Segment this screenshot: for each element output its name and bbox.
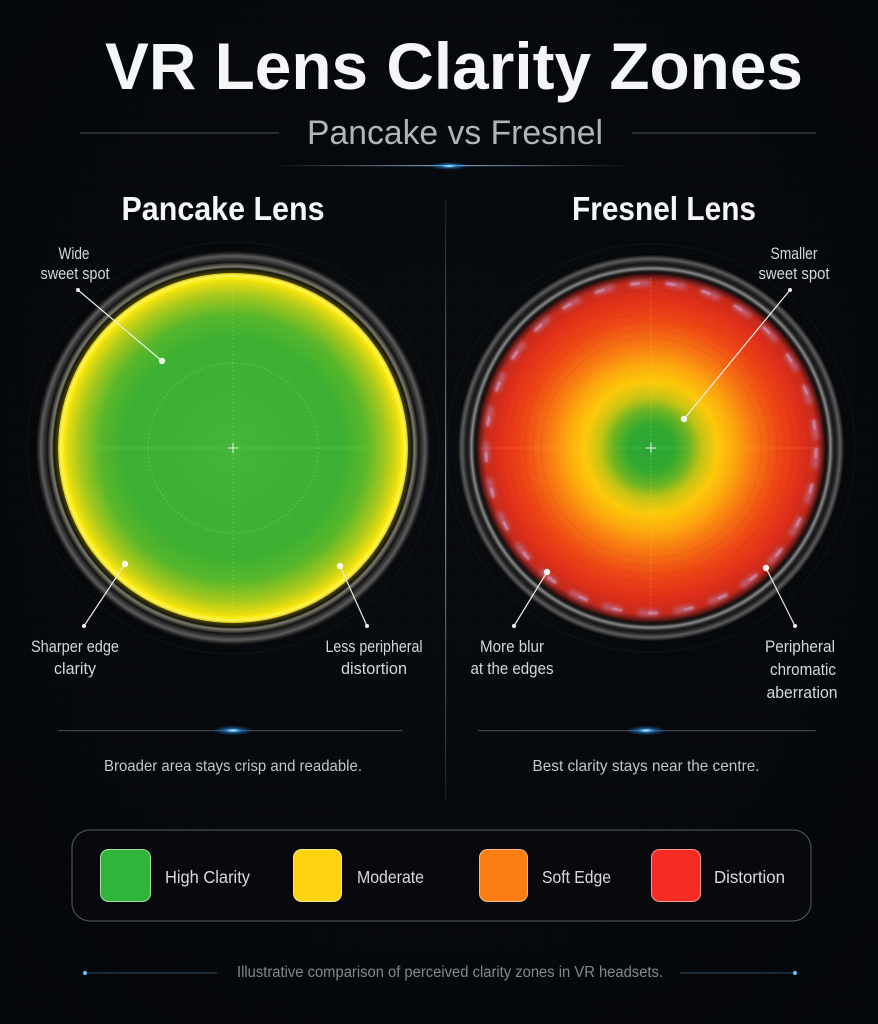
subtitle: Pancake vs Fresnel: [307, 114, 603, 152]
footnote: Illustrative comparison of perceived clarity zones in VR headsets.: [237, 964, 663, 981]
legend: [72, 830, 811, 921]
legend item: high clarity: [100, 850, 250, 902]
callout: smaller sweet spot: [681, 245, 830, 422]
panel: pancake lens: [27, 190, 439, 775]
legend item: soft edge: Soft Edge: [542, 867, 611, 887]
callout: peripheral chromatic aberration: Peripheral: [765, 638, 835, 656]
callout: less peripheral distortion: distortion: [341, 660, 407, 678]
callout: wide sweet spot: Wide: [58, 245, 90, 263]
callout: less peripheral distortion: [326, 563, 422, 678]
callout: sharper edge clarity: Sharper edge: [31, 638, 119, 656]
callout: wide sweet spot: [40, 245, 165, 364]
panel: fresnel lens: [447, 190, 855, 775]
chromatic aberration band: [486, 283, 816, 613]
lens diagram: pancake: [27, 242, 439, 654]
callout: peripheral chromatic aberration: aberration: [766, 684, 838, 702]
callout: smaller sweet spot: sweet spot: [758, 265, 830, 283]
header accent divider: [270, 162, 630, 170]
legend item: high clarity: High Clarity: [165, 867, 250, 887]
callout: peripheral chromatic aberration: [763, 565, 838, 702]
callout: smaller sweet spot: Smaller: [770, 245, 818, 263]
caption: pancake: Broader area stays crisp and readable.: [104, 758, 362, 775]
callout: peripheral chromatic aberration: chromatic: [770, 661, 836, 679]
callout: more blur at the edges: More blur: [480, 638, 544, 656]
accent divider: [478, 726, 816, 736]
legend item: soft edge: [480, 850, 611, 902]
footnote: [83, 964, 797, 981]
callout: sharper edge clarity: clarity: [54, 660, 97, 678]
title: VR Lens Clarity Zones: [105, 29, 803, 103]
callout: less peripheral distortion: Less peripheral: [326, 638, 422, 656]
heading: pancake lens: Pancake Lens: [122, 190, 324, 227]
callout: more blur at the edges: at the edges: [470, 660, 554, 678]
caption: fresnel: Best clarity stays near the centre.: [532, 758, 760, 775]
callout: more blur at the edges: [470, 569, 554, 678]
lens diagram: fresnel: [447, 244, 855, 652]
fresnel ridges: [493, 290, 809, 606]
legend item: distortion: Distortion: [714, 867, 785, 887]
heading: fresnel lens: Fresnel Lens: [572, 190, 756, 227]
legend item: moderate: Moderate: [357, 867, 424, 887]
accent divider: [58, 726, 403, 736]
centre vertical divider: [445, 200, 446, 800]
legend item: distortion: [652, 850, 785, 902]
legend item: moderate: [294, 850, 424, 902]
callout: wide sweet spot: sweet spot: [40, 265, 110, 283]
callout: sharper edge clarity: [31, 561, 128, 678]
